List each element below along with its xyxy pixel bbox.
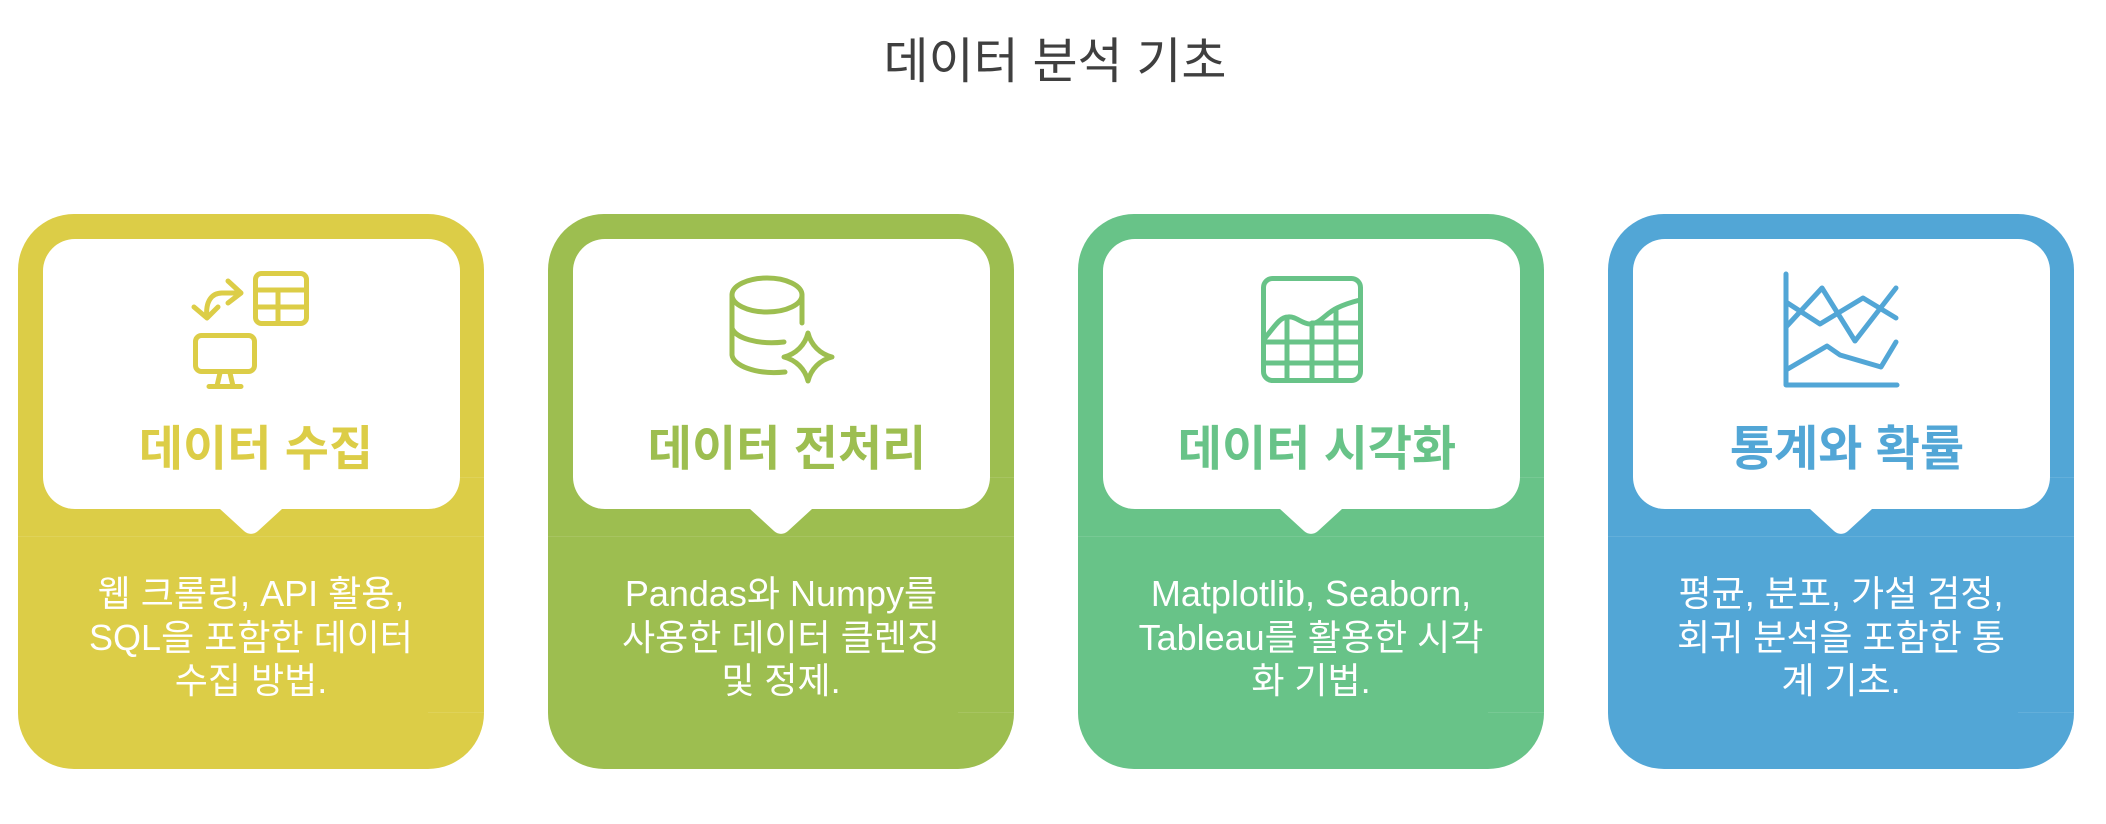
speech bubble xyxy=(1633,239,2050,534)
description: Tableau를 활용한 시각 xyxy=(1139,617,1483,658)
panel: 데이터 전처리 xyxy=(548,214,1014,769)
icon: database with sparkle xyxy=(732,278,832,381)
speech bubble xyxy=(573,239,990,534)
heading: 데이터 수집 xyxy=(139,409,373,479)
description: 사용한 데이터 클렌징 xyxy=(622,617,940,658)
description: 회귀 분석을 포함한 통 xyxy=(1677,617,2005,658)
speech bubble xyxy=(1103,239,1520,534)
description: Matplotlib, Seaborn, xyxy=(1151,573,1471,614)
heading: 통계와 확률 xyxy=(1730,409,1964,479)
icon: multi-line chart xyxy=(1786,274,1897,385)
speech bubble xyxy=(43,239,460,534)
description: 평균, 분포, 가설 검정, xyxy=(1679,573,2003,614)
panel: 데이터 수집 xyxy=(18,214,484,769)
description: SQL을 포함한 데이터 xyxy=(89,617,413,658)
card background xyxy=(18,214,484,769)
description: 및 정제. xyxy=(721,660,841,701)
card background xyxy=(1608,214,2074,769)
description: 화 기법. xyxy=(1251,660,1371,701)
description: 웹 크롤링, API 활용, xyxy=(98,573,404,614)
description: 계 기초. xyxy=(1781,660,1901,701)
card background xyxy=(548,214,1014,769)
panel: 통계와 확률 xyxy=(1608,214,2074,769)
description: 수집 방법. xyxy=(175,660,327,701)
heading: 데이터 전처리 xyxy=(648,409,926,479)
icon: data transfer between monitor and table xyxy=(194,274,306,386)
icon: area chart on grid xyxy=(1264,278,1360,380)
title: 데이터 분석 기초 xyxy=(883,22,1227,93)
panel: 데이터 시각화 xyxy=(1078,214,1544,769)
description: Pandas와 Numpy를 xyxy=(625,573,937,614)
card background xyxy=(1078,214,1544,769)
heading: 데이터 시각화 xyxy=(1178,409,1456,479)
